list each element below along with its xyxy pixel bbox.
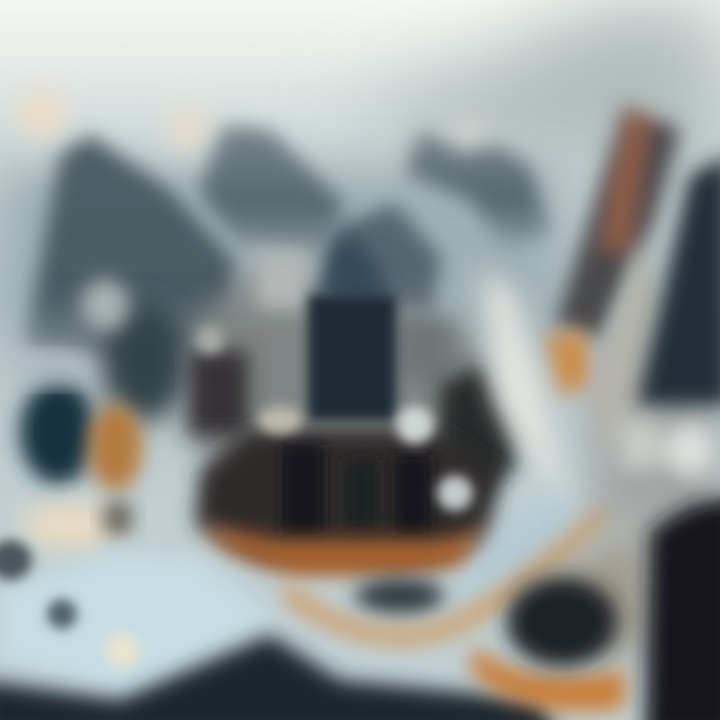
grey mass around central city: [185, 265, 520, 480]
plaza details: [0, 540, 139, 667]
distant ridge top right: [340, 0, 720, 180]
lower right pale buildings: [620, 420, 716, 476]
pale blue water right of building: [450, 490, 580, 610]
lower building columns: [282, 445, 431, 535]
right flanking tower: [440, 365, 518, 500]
left orange structure: [88, 403, 142, 491]
left dark knoll: [101, 302, 189, 422]
sphere halo: [10, 358, 90, 382]
lower right tan ground: [520, 520, 650, 660]
left warm ground: [20, 503, 120, 547]
bottom right orange curve: [470, 645, 625, 711]
right tower: brown: [555, 105, 680, 340]
mountain: left large: [25, 135, 235, 360]
small dark post: [104, 500, 132, 536]
lower building mass: [195, 430, 500, 560]
central tower: [308, 295, 396, 420]
right tower: pale side: [590, 240, 660, 460]
pale left patch: [81, 279, 129, 331]
mountain: center mid: [330, 203, 442, 315]
left sphere building: [20, 380, 96, 484]
haze band behind mountains: [0, 170, 560, 340]
left building block: [190, 350, 248, 435]
pale mid buildings: [255, 250, 450, 380]
pale road to right: [480, 270, 590, 510]
far right tall dark tower: [638, 155, 720, 405]
right tower: orange base: [545, 330, 592, 395]
far right foreground tower: [645, 495, 720, 720]
mountain: right back: [405, 130, 550, 248]
mountain: center back: [198, 125, 345, 260]
orange base of building: [200, 525, 490, 575]
pale blue plaza: [0, 550, 275, 695]
warm glow spots: [20, 93, 482, 150]
road: winding warm path: [285, 505, 610, 636]
right grey mass: [590, 330, 720, 540]
central tower dome: [316, 232, 392, 300]
base shadow: [355, 578, 445, 614]
pale highlights on building: [196, 326, 473, 511]
foreground dark bottom: [0, 635, 560, 720]
bottom right sphere: [507, 578, 617, 666]
